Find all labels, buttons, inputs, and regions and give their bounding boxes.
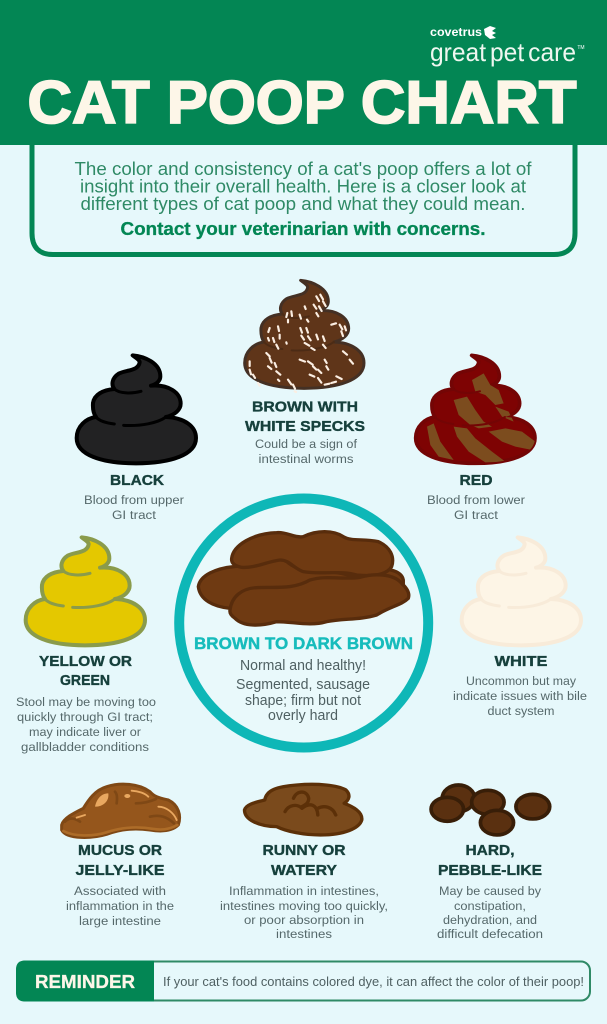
intro text: different types of cat poop and what they could mean. [80, 194, 526, 214]
logo: covetrus great pet care: great pet care [430, 37, 576, 67]
label: yellow or green: Stool may be moving too [16, 695, 156, 709]
label: yellow or green: gallbladder conditions [21, 740, 149, 754]
poop: red [416, 355, 535, 463]
logo: covetrus great pet care: covetrus [430, 27, 482, 39]
reminder bar [16, 960, 590, 1002]
label: red: RED [460, 473, 492, 489]
intro text [74, 159, 533, 214]
intro text: The color and consistency of a cat's poop offers a lot of [74, 159, 533, 179]
description: normal and healthy: overly hard [268, 708, 338, 724]
label: hard pebble-like: constipation, [454, 899, 526, 913]
description: normal and healthy: Normal and healthy! [240, 658, 366, 674]
label: white [453, 654, 587, 718]
label: runny or watery: Inflammation in intestines, [229, 884, 379, 898]
label: hard pebble-like: May be caused by [439, 884, 542, 898]
label: black: BLACK [110, 473, 165, 489]
label: yellow or green: may indicate liver or [29, 725, 141, 739]
label: red: Blood from lower [427, 493, 525, 507]
label: brown with white specks: BROWN WITH [252, 400, 358, 416]
icon: covetrus mark [484, 26, 496, 39]
label: runny or watery [220, 843, 388, 941]
label: red: GI tract [454, 508, 499, 522]
label: yellow or green: YELLOW OR [39, 654, 133, 670]
label: runny or watery: WATERY [271, 863, 337, 879]
label: yellow or green: quickly through GI tract; [17, 710, 153, 724]
description: normal and healthy: Segmented, sausage [236, 677, 370, 693]
label: hard pebble-like: difficult defecation [437, 927, 543, 941]
poop: white [462, 537, 581, 645]
poop: runny or watery [244, 784, 362, 835]
description: normal and healthy [236, 658, 370, 724]
poop: healthy sausage [198, 532, 409, 625]
poop: yellow or green [26, 537, 145, 645]
label: mucus or jelly-like: Associated with [74, 884, 166, 898]
label: mucus or jelly-like: JELLY-LIKE [76, 863, 165, 879]
label: hard pebble-like: HARD, [466, 843, 514, 859]
label: mucus or jelly-like: MUCUS OR [78, 843, 163, 859]
label: yellow or green: GREEN [60, 673, 110, 689]
label: white: WHITE [494, 654, 548, 670]
label: mucus or jelly-like [66, 843, 174, 928]
contact callout: Contact your veterinarian with concerns. [120, 219, 486, 239]
reminder text: If your cat's food contains colored dye, it can affect the color of their poop! [163, 974, 584, 989]
label: hard pebble-like [437, 843, 543, 941]
label: white: indicate issues with bile [453, 689, 587, 703]
reminder heading: REMINDER [35, 971, 135, 992]
panel: brown to dark brown circle [179, 498, 428, 748]
poop: black [77, 355, 196, 463]
label: brown with white specks: Could be a sign of [255, 437, 358, 451]
label: black: GI tract [112, 508, 157, 522]
label: brown with white specks [245, 400, 365, 466]
label: hard pebble-like: PEBBLE-LIKE [438, 863, 542, 879]
header band [0, 0, 607, 145]
label: red [427, 473, 525, 522]
label: runny or watery: or poor absorption in [244, 913, 364, 927]
logo: covetrus great pet care: TM [577, 45, 585, 51]
label: black: Blood from upper [84, 493, 184, 507]
intro panel [32, 145, 575, 254]
label: runny or watery: RUNNY OR [262, 843, 346, 859]
label: white: Uncommon but may [466, 674, 577, 688]
poop: mucus or jelly-like [62, 784, 180, 837]
title: CAT POOP CHART [28, 69, 576, 136]
label: brown with white specks: intestinal worms [258, 452, 354, 466]
label: brown with white specks: WHITE SPECKS [245, 419, 365, 435]
description: normal and healthy: shape; firm but not [245, 693, 361, 709]
label: mucus or jelly-like: inflammation in the [66, 899, 174, 913]
label: mucus or jelly-like: large intestine [79, 914, 161, 928]
label: yellow or green [16, 654, 156, 754]
poop: brown with white specks [245, 280, 364, 392]
label: runny or watery: intestines [276, 927, 332, 941]
label: black [84, 473, 184, 522]
label: hard pebble-like: dehydration, and [443, 913, 537, 927]
heading: brown to dark brown: BROWN TO DARK BROWN [194, 634, 413, 653]
label: runny or watery: intestines moving too quickly, [220, 899, 388, 913]
intro text: insight into their overall health. Here is a closer look at [80, 176, 526, 196]
label: white: duct system [488, 704, 554, 718]
poop: hard pebbles [431, 785, 550, 835]
